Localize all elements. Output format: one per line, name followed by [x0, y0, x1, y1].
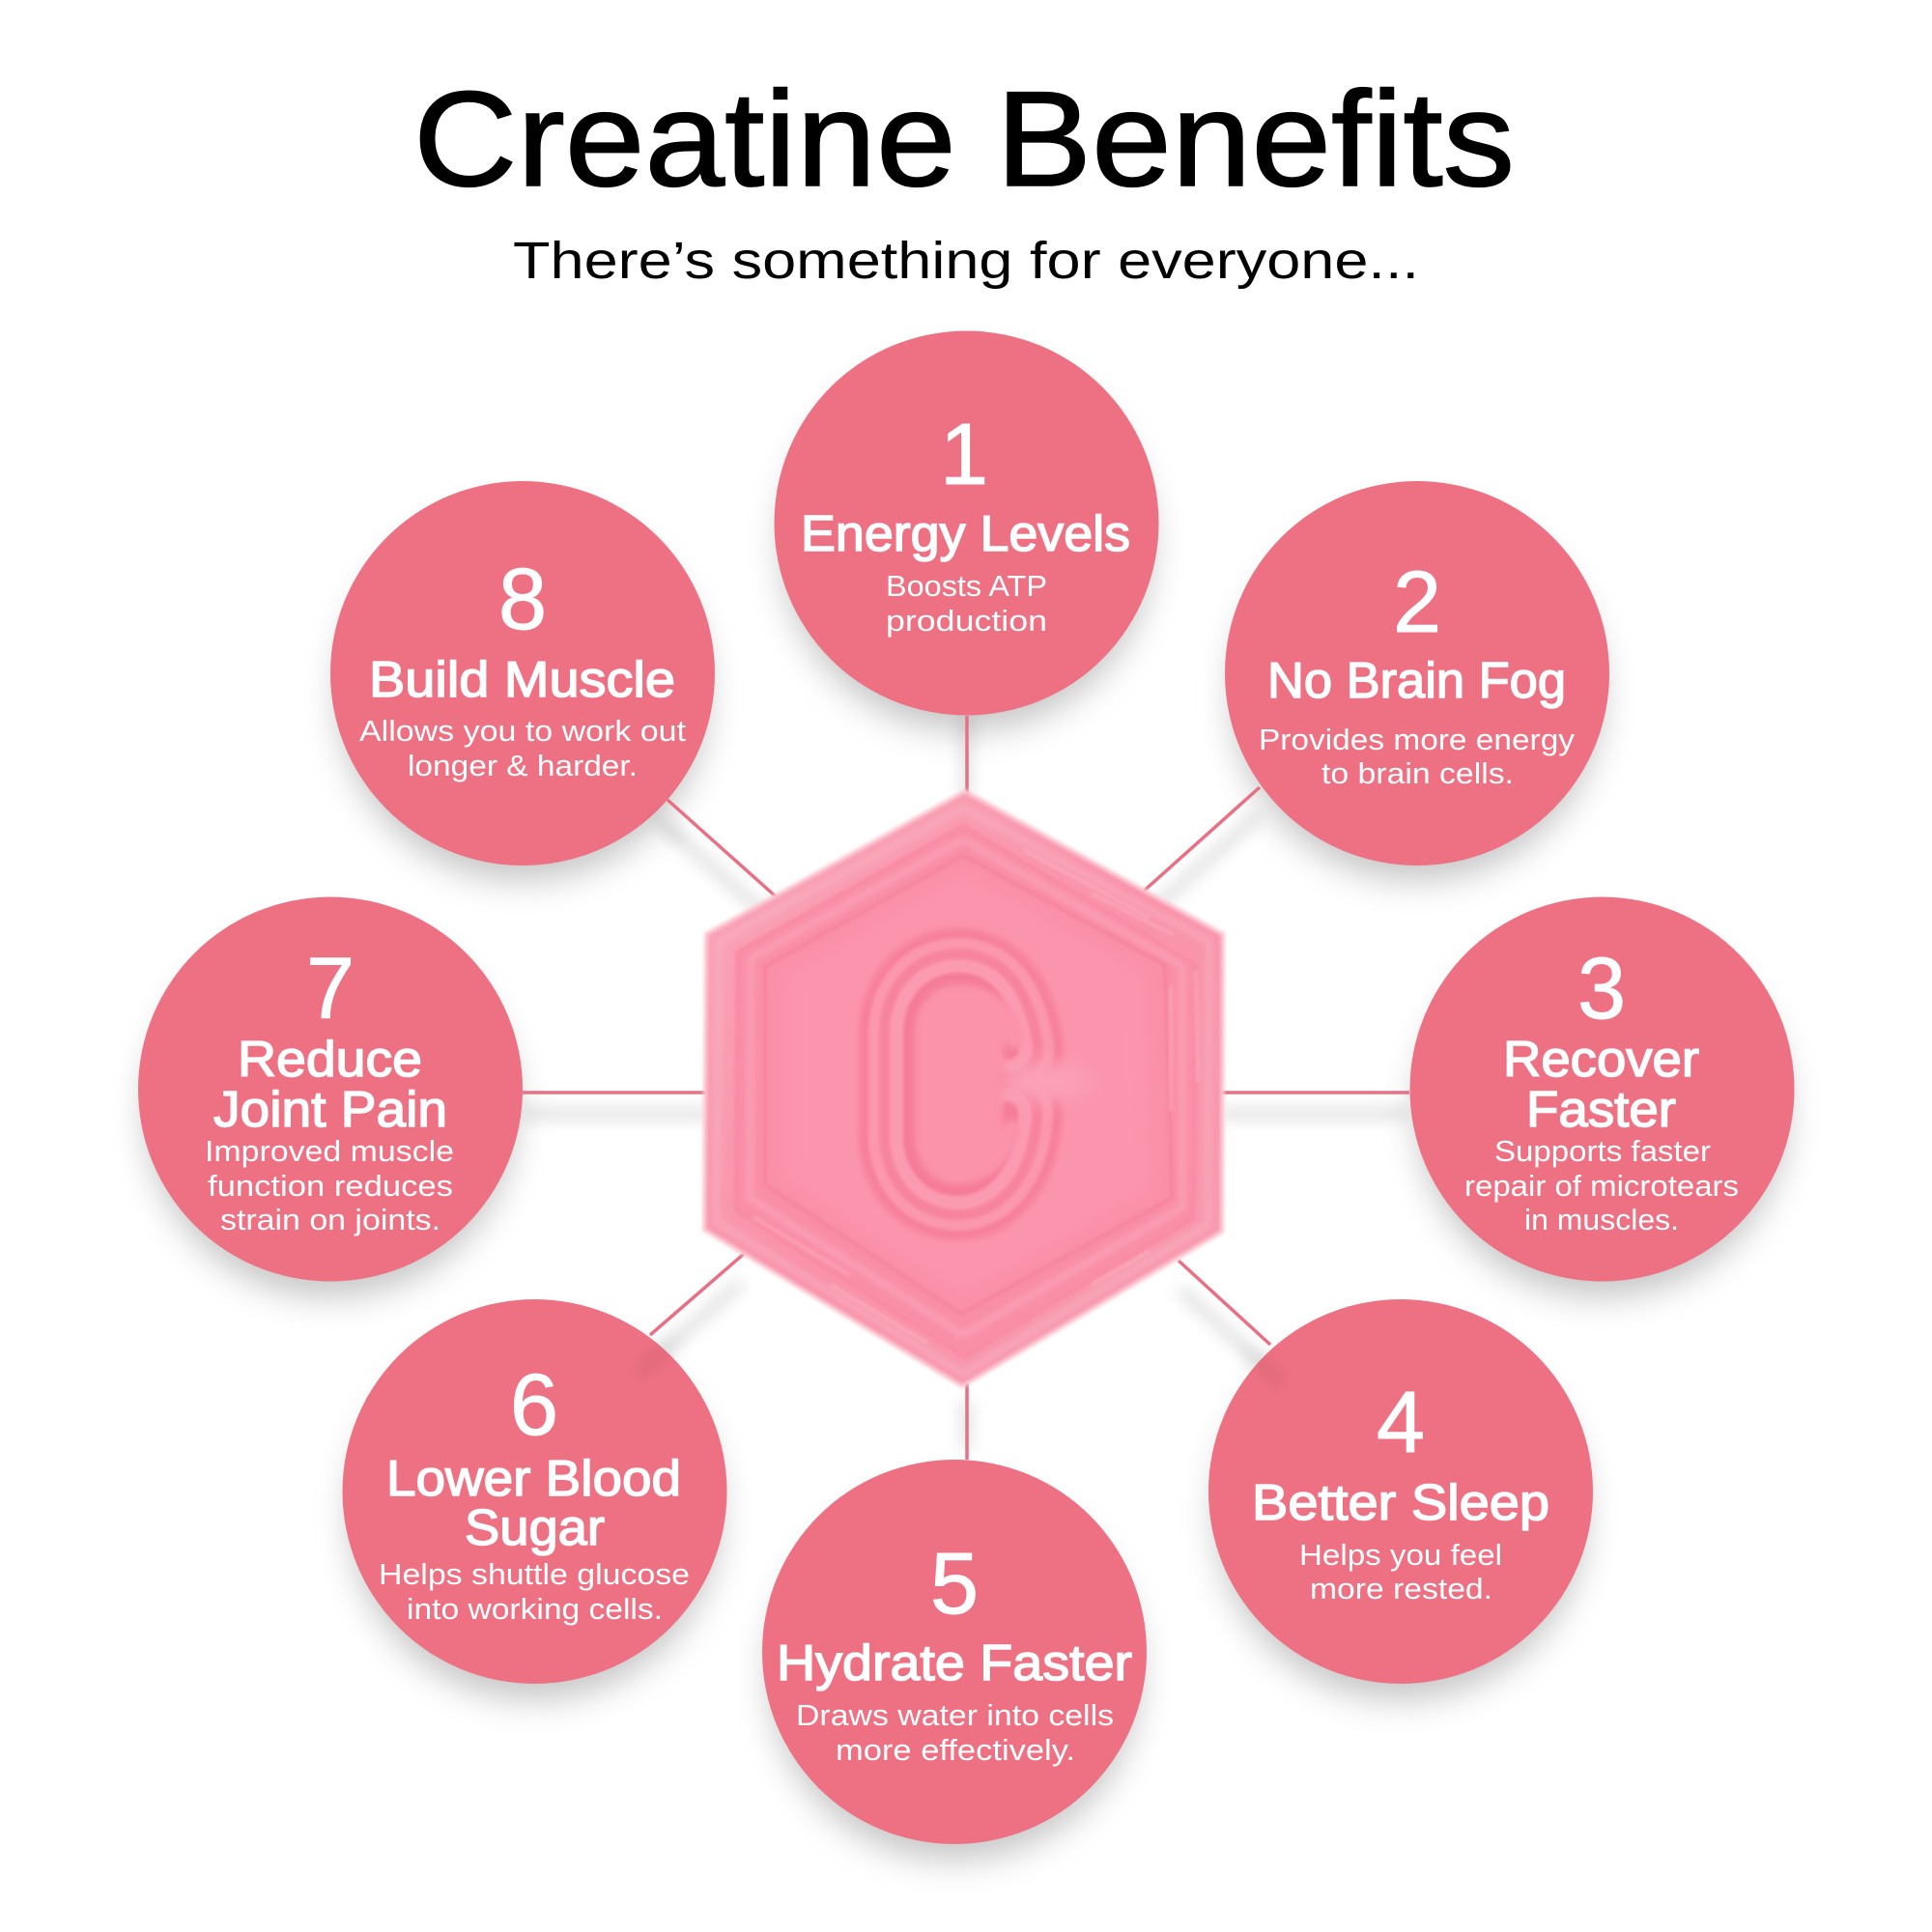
connector shadows over circles: [638, 813, 1283, 1383]
hexagon inner face: [765, 856, 1172, 1314]
central hexagon tablet with letter C: [704, 791, 1223, 1386]
connector lines: [523, 716, 1409, 1460]
heading: Hydrate Faster: [777, 1635, 1132, 1691]
description: Boosts ATP: [886, 569, 1047, 603]
circle shadows: [145, 360, 1787, 1861]
number 5: 5: [930, 1536, 979, 1633]
description: strain on joints.: [220, 1203, 440, 1236]
heading: Energy Levels: [801, 506, 1130, 562]
number 6: 6: [510, 1357, 558, 1454]
description: Helps you feel: [1299, 1538, 1502, 1572]
circle 1: energy levels: [775, 330, 1159, 715]
number 4: 4: [1377, 1375, 1425, 1471]
description: Helps shuttle glucose: [379, 1557, 690, 1591]
circle 6: lower blood sugar: [342, 1299, 726, 1684]
number 3: 3: [1577, 941, 1626, 1037]
description: more rested.: [1310, 1572, 1492, 1605]
heading: Better Sleep: [1252, 1475, 1549, 1531]
scratches on edges: [753, 850, 1198, 1343]
embossed letter C: [915, 984, 1008, 1184]
number 7: 7: [306, 941, 355, 1037]
hexagon outer edge: [704, 791, 1223, 1386]
number 8: 8: [498, 552, 547, 648]
description: Improved muscle: [205, 1134, 454, 1168]
description: Draws water into cells: [796, 1698, 1114, 1732]
circle 3: recover faster: [1410, 896, 1795, 1281]
heading: Reduce: [238, 1032, 422, 1088]
number 1: 1: [940, 407, 988, 503]
C inner body: [915, 984, 1024, 1184]
title: Creatine Benefits: [413, 63, 1515, 214]
heading: Lower Blood: [386, 1451, 681, 1507]
description: Supports faster: [1494, 1134, 1711, 1168]
heading: Sugar: [465, 1500, 605, 1556]
description: repair of microtears: [1464, 1169, 1739, 1203]
C opening notch: [1001, 1062, 1090, 1102]
description: function reduces: [208, 1169, 453, 1203]
heading: Joint Pain: [213, 1082, 447, 1138]
hexagon middle step: [735, 825, 1197, 1357]
description: longer & harder.: [408, 749, 638, 782]
description: production: [886, 604, 1047, 638]
heading: Build Muscle: [369, 652, 675, 708]
description: in muscles.: [1524, 1203, 1679, 1236]
circle 8: build muscle: [330, 481, 715, 866]
subtitle: There’s something for everyone...: [513, 232, 1419, 290]
description: more effectively.: [836, 1733, 1075, 1767]
circle 7: reduce joint pain: [138, 896, 523, 1281]
circle 4: better sleep: [1208, 1299, 1593, 1684]
heading: Faster: [1526, 1082, 1676, 1138]
connector shadows: [523, 716, 1409, 1449]
heading: No Brain Fog: [1267, 653, 1566, 709]
description: Allows you to work out: [359, 714, 686, 748]
soft shading of the face: [784, 874, 1151, 1294]
circle 2: no brain fog: [1225, 481, 1609, 866]
description: Provides more energy: [1259, 723, 1576, 756]
description: to brain cells.: [1321, 756, 1514, 790]
description: into working cells.: [407, 1592, 663, 1626]
circle 5: hydrate faster: [762, 1460, 1147, 1844]
heading: Recover: [1503, 1032, 1699, 1088]
number 2: 2: [1393, 554, 1441, 651]
